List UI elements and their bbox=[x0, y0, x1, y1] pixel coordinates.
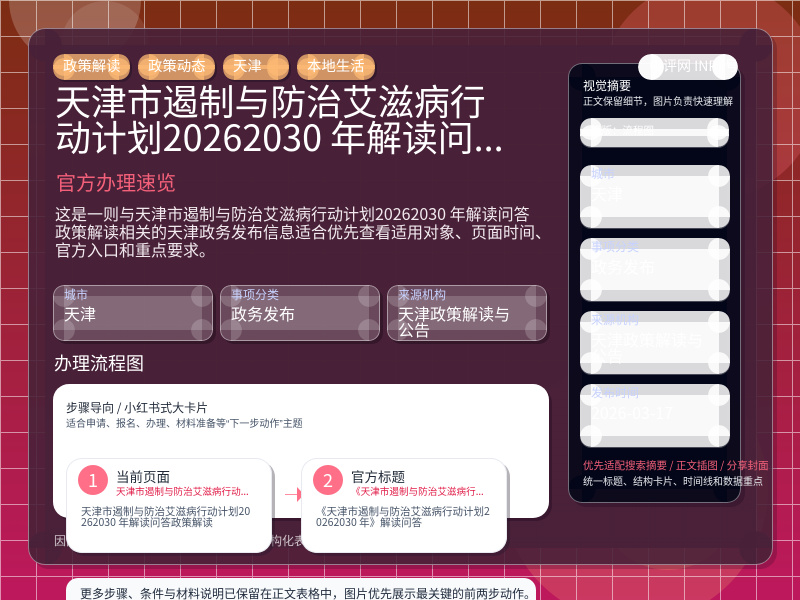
title bbox=[55, 74, 504, 162]
title: 天津市遏制与防治艾滋病行 bbox=[55, 74, 486, 126]
description text bbox=[55, 201, 551, 261]
step 1 body bbox=[81, 504, 250, 530]
tags row bbox=[53, 54, 377, 82]
info card: 来源机构 bbox=[387, 285, 547, 341]
description text: 政策解读相关的天津政务发布信息适合优先查看适用对象、页面时间、 bbox=[55, 219, 551, 243]
tag: 本地生活 bbox=[297, 54, 375, 80]
bottom note bbox=[66, 578, 536, 600]
flow panel subtitle: 适合申请、报名、办理、材料准备等“下一步动作”主题 bbox=[66, 415, 303, 430]
step number 2 bbox=[313, 465, 343, 495]
side card: 事项分类: 事项分类 bbox=[591, 238, 639, 255]
step card 1 bbox=[66, 458, 272, 553]
step card 2 bbox=[301, 458, 507, 553]
step 2 body bbox=[316, 504, 490, 530]
tag: 政策解读 bbox=[53, 54, 130, 80]
side panel sub heading: 正文保留细节，图片负责快速理解 bbox=[583, 93, 733, 108]
side card: 来源机构: 天津政策解读与 bbox=[591, 327, 703, 351]
side footer text: 统一标题、结构卡片、时间线和数据重点 bbox=[583, 473, 763, 488]
flow panel title: 步骤导向 / 小红书式大卡片 bbox=[66, 399, 208, 416]
side card: 城市: 天津 bbox=[591, 181, 623, 205]
info card: 来源机构: 来源机构 bbox=[398, 286, 446, 303]
tag: 本地生活: 本地生活 bbox=[307, 55, 365, 76]
side card: 发布时间: 2026-03-17 bbox=[591, 400, 673, 424]
side template pill: 模版：流程图 bbox=[591, 123, 654, 138]
info card: 来源机构: 天津政策解读与 bbox=[398, 301, 510, 325]
tag: 政策动态 bbox=[138, 54, 215, 80]
side card: 来源机构: 公告 bbox=[591, 343, 623, 367]
side card: 来源机构 bbox=[580, 311, 730, 374]
description text: 官方入口和重点要求。 bbox=[55, 237, 215, 261]
info card: 城市: 天津 bbox=[64, 301, 96, 325]
side card: 发布时间 bbox=[580, 384, 730, 447]
title: 动计划20262030 年解读问... bbox=[55, 110, 504, 162]
side card: 城市 bbox=[580, 165, 730, 228]
step number 2: 2 bbox=[323, 467, 333, 493]
step number 1 bbox=[78, 465, 108, 495]
side panel bbox=[568, 63, 741, 503]
side card: 事项分类: 政务发布 bbox=[591, 254, 655, 278]
info cards row bbox=[53, 285, 550, 344]
side card: 事项分类 bbox=[580, 238, 730, 301]
side card: 发布时间: 发布时间 bbox=[591, 384, 639, 401]
tag: 天津: 天津 bbox=[233, 55, 262, 76]
subtitle: 官方办理速览 bbox=[56, 167, 176, 196]
side template pill bbox=[580, 118, 729, 147]
tag: 政策解读: 政策解读 bbox=[63, 55, 121, 76]
info card: 事项分类: 事项分类 bbox=[231, 286, 279, 303]
side footer highlight: 优先适配搜索摘要 / 正文插图 / 分享封面 bbox=[583, 458, 769, 473]
side panel badge: 中评网 INPI 号 bbox=[649, 56, 738, 76]
step 2 body: 0262030 年》解读问答 bbox=[316, 515, 422, 530]
step 1 body: 262030 年解读问答政策解读 bbox=[81, 515, 213, 530]
flow section heading: 办理流程图 bbox=[54, 350, 144, 376]
info card: 事项分类 bbox=[220, 285, 380, 341]
step number 1: 1 bbox=[88, 467, 98, 493]
step 1 body: 天津市遏制与防治艾滋病行动计划20 bbox=[81, 504, 250, 519]
tag: 天津 bbox=[223, 54, 289, 80]
side card: 城市: 城市 bbox=[591, 165, 615, 182]
info card: 事项分类: 政务发布 bbox=[231, 301, 295, 325]
info card: 来源机构: 公告 bbox=[398, 317, 430, 341]
step 1 subtitle: 天津市遏制与防治艾滋病行动... bbox=[116, 484, 249, 498]
step 2 body: 《天津市遏制与防治艾滋病行动计划2 bbox=[316, 504, 490, 519]
info card: 城市: 城市 bbox=[64, 286, 88, 303]
info card: 城市 bbox=[53, 285, 213, 341]
side card: 来源机构: 来源机构 bbox=[591, 311, 639, 328]
step 2 subtitle: 《天津市遏制与防治艾滋病行... bbox=[351, 484, 484, 498]
step 2 title: 官方标题 bbox=[351, 466, 405, 486]
description text: 这是一则与天津市遏制与防治艾滋病行动计划20262030 年解读问答 bbox=[55, 201, 530, 225]
side panel heading: 视觉摘要 bbox=[583, 77, 631, 94]
footnote text behind step cards: 因内容较多，流程细节已整理为下方的结构化表格 bbox=[54, 532, 318, 549]
flow panel bbox=[53, 384, 549, 518]
tag: 政策动态: 政策动态 bbox=[148, 55, 206, 76]
arrow between steps bbox=[285, 487, 301, 502]
step 1 title: 当前页面 bbox=[116, 466, 170, 486]
side panel badge bbox=[638, 54, 738, 80]
